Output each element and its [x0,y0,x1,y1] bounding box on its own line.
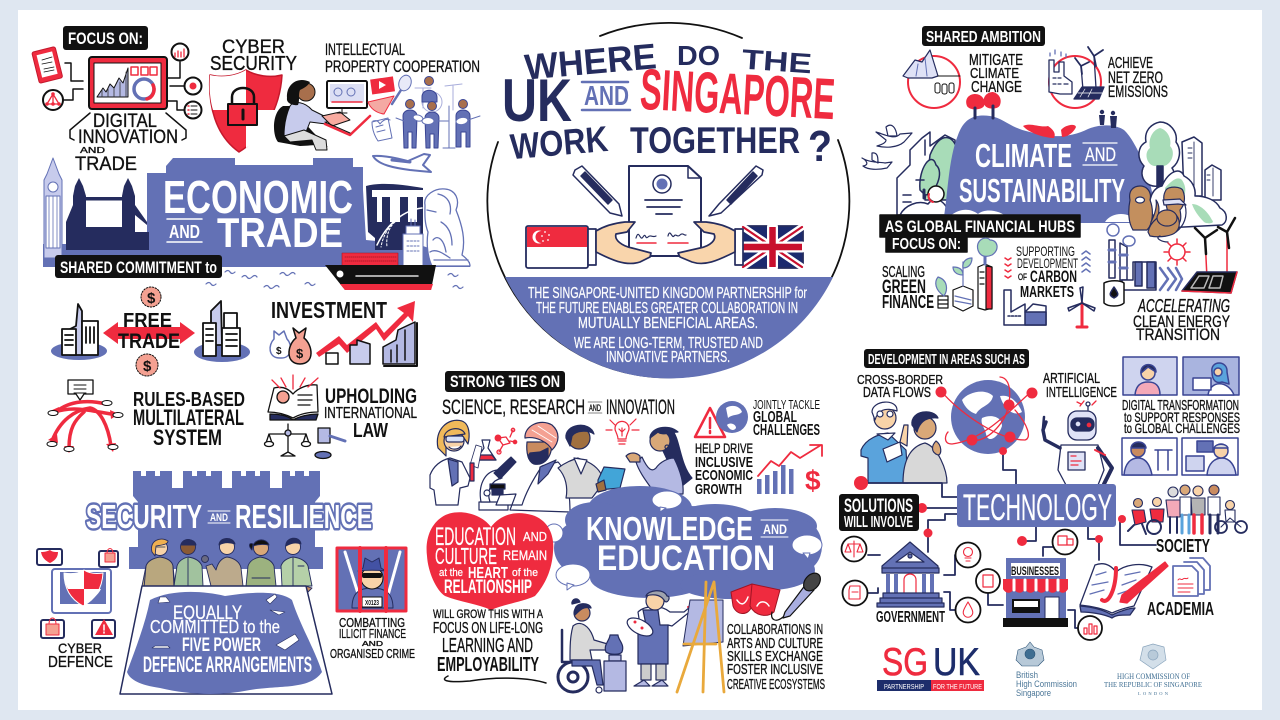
icon: cyber defence: CYBER [58,640,102,656]
images: digital transformation panels [1122,357,1239,475]
shared commitment label: SHARED COMMITMENT to [60,258,217,277]
illustration: globe with data orbits [936,377,1038,454]
block: free trade [51,287,250,376]
summary text: WE ARE LONG-TERM, TRUSTED AND [574,335,763,352]
castle backdrop [129,471,323,569]
illustration: two men discussing [861,402,947,483]
panel: security and resilience [37,471,415,694]
summary text: MUTUALLY BENEFICIAL AREAS. [578,315,758,332]
text: five power defence arrangements [143,603,312,677]
text: collaborations in arts and culture: FOSTER INCLUSIVE [727,661,823,678]
icon: money bags: $ [296,346,304,361]
icon: scales and gavel [264,424,345,458]
technology box [957,484,1116,528]
text: accelerating clean energy transition [1133,296,1230,344]
text: upholding international law: UPHOLDING [325,385,417,408]
text: supporting development of carbon markets [1016,243,1078,301]
financial hubs label [880,215,1080,253]
icon: money bags [270,328,311,364]
illustration: otters [1129,186,1186,242]
text: accelerating clean energy transition: TRANSITION [1136,325,1220,344]
text: five power defence arrangements: FIVE POWER [182,635,261,656]
heart: education and culture: CULTURE [435,543,497,569]
heading: science, research and innovation: SCIENCE, RESEARCH [442,396,585,419]
label: government: GOVERNMENT [876,609,945,626]
summary text: INNOVATIVE PARTNERS. [606,349,730,366]
molecule [495,428,517,454]
text: upholding international law [324,385,417,442]
solutions label [839,494,919,531]
focus on label [63,26,148,50]
heading: science, research and innovation: AND [589,403,601,413]
text: five power defence arrangements: COMMITTED to the [150,617,280,637]
logo: high commission of the republic of singapore [1104,644,1202,696]
heart: education and culture: RELATIONSHIP [444,577,532,598]
summary text: THE FUTURE ENABLES GREATER COLLABORATION IN [536,300,798,317]
title: UK [502,67,572,134]
scientist with flask [430,420,496,505]
text: artificial intelligence: INTELLIGENCE [1046,384,1117,401]
heading: economic and trade: ECONOMIC [163,171,353,223]
text: collaborations in arts and culture [727,621,825,693]
icon: carbon market arrows [1005,251,1090,278]
logo: british high commission singapore [1016,642,1077,699]
lightbulb [606,419,639,444]
solutions label: SOLUTIONS [844,496,913,517]
icon: open book with pen [1080,562,1168,618]
text: supporting development of carbon markets: OF [1018,272,1027,282]
development label: DEVELOPMENT IN AREAS SUCH AS [868,351,1025,368]
text: artificial intelligence: ARTIFICIAL [1043,370,1100,387]
icon: signed document [629,166,701,256]
illustration: right buildings and trees [1139,122,1226,228]
text: combatting illicit finance: ILLICIT FINANCE [339,627,406,641]
hill with trees [943,92,1162,223]
icon: shaking hands with document [588,222,743,265]
circle outline [487,23,849,377]
shared commitment label [55,255,222,278]
icon: warning and globe [695,401,748,437]
text: free trade [118,310,180,353]
technology box: TECHNOLOGY [963,487,1112,528]
logo: sg uk partnership for the future: SG [882,641,928,684]
heading: knowledge and education [586,510,788,578]
text: achieve net zero emissions [1108,55,1168,101]
block: rules-based multilateral system [47,380,245,453]
text: life-long learning and employability: WILL GROW THIS WITH A [433,607,543,621]
illustration: easel [677,582,724,692]
heart: education and culture: at the [439,567,463,579]
icon: singapore flag [526,226,588,268]
heading: security and resilience: RESILIENCE [235,498,372,535]
icon: theatre masks [731,584,780,615]
icon: factory and wind turbine [1004,287,1095,327]
financial hubs label: AS GLOBAL FINANCIAL HUBS [885,218,1075,236]
illustration: painter [624,591,698,686]
title: AND [584,80,629,111]
heading: economic and trade: AND [169,222,200,242]
microscope [479,457,516,510]
text: upholding international law: INTERNATIONAL [324,405,417,422]
text: free trade: FREE [123,310,172,332]
icon: pens [573,166,763,216]
focus on label: FOCUS ON: [68,29,143,48]
text: combatting illicit finance: AND [362,641,383,648]
text: rules-based multilateral system: RULES-BASED [133,389,245,411]
heading: climate and sustainability: SUSTAINABILITY [959,172,1125,209]
heart: education and culture: HEART [468,565,508,582]
text: five power defence arrangements: EQUALLY [173,603,242,624]
heading: cyber security: CYBER [222,37,285,58]
icon: lighthouse tower [403,219,423,268]
text: digital innovation and trade [70,111,186,175]
icon: red trade arrow [103,322,195,344]
heart: education and culture: EDUCATION [435,523,516,551]
text: life-long learning and employability [433,607,546,683]
text: mitigate climate change: MITIGATE [969,52,1023,69]
text: five power defence arrangements: DEFENCE ARRANGEMENTS [143,652,312,677]
illustration: scientists [430,419,692,512]
connector nodes [854,447,1126,546]
text: accelerating clean energy transition: ACCELERATING [1137,296,1230,316]
text: upholding international law: LAW [353,420,388,442]
block: upholding international law [264,375,417,458]
heart: education and culture: of the [512,567,538,579]
heading: security and resilience: AND [210,512,228,524]
text: digital innovation and trade: INNOVATION [78,127,178,148]
icon: factory and renewables [1049,47,1104,108]
text: help drive inclusive economic growth: HELP DRIVE [695,440,753,456]
heading: economic and trade: TRADE [217,209,343,256]
icon: dollar shields: $ [143,358,152,375]
icon: microphone [772,570,824,620]
icon: government building [877,542,944,607]
block: investment [270,297,417,366]
text: jointly tackle global challenges: GLOBAL [753,409,797,426]
shared ambition label [922,26,1045,46]
icon: clean energy transition [1104,218,1237,306]
icon: businesses shop [1003,558,1068,627]
logos [877,641,1202,699]
text: mitigate climate change: CLIMATE [970,65,1019,82]
icon: dollar shields [136,287,161,376]
text: scaling green finance: GREEN [882,277,926,298]
heart: education and culture: AND [523,529,547,544]
heading: climate and sustainability: CLIMATE [975,137,1072,174]
panel: central title circle [487,23,849,379]
text: mitigate climate change: CHANGE [971,79,1022,96]
text: combatting illicit finance: ORGANISED CRIME [330,646,415,661]
text: digital innovation and trade: AND [80,146,105,155]
heading: climate and sustainability: AND [1085,145,1116,166]
icon: network arcs [47,380,123,453]
text: accelerating clean energy transition: CLEAN ENERGY [1133,312,1230,331]
panel: climate and sustainability [862,26,1237,344]
title: THE [741,44,813,79]
icon: container ship [325,253,436,290]
icon: big ben [44,158,62,258]
icon: cyber defence: DEFENCE [48,654,113,671]
shared ambition label: SHARED AMBITION [926,29,1041,46]
text: achieve net zero emissions: EMISSIONS [1108,82,1168,101]
logo: british high commission singapore: British [1016,670,1038,681]
text: scaling green finance [882,264,934,312]
text: mitigate climate change [969,52,1023,96]
text: jointly tackle global challenges [753,397,820,439]
illustration: left buildings and tree [897,132,957,215]
text: collaborations in arts and culture: CREATIVE ECOSYSTEMS [727,676,825,693]
man with tablet [558,425,625,498]
text: supporting development of carbon markets: SUPPORTING [1016,243,1075,259]
text: cross-border data flows: DATA FLOWS [863,384,931,401]
icon: cyber defence [37,548,118,671]
text: artificial intelligence [1043,370,1117,401]
heading: intellectual property cooperation [325,40,480,76]
text: collaborations in arts and culture: COLLABORATIONS IN [727,621,823,638]
text: supporting development of carbon markets: MARKETS [1020,284,1074,301]
text: combatting illicit finance: COMBATTING [339,615,405,630]
label: academia: ACADEMIA [1147,599,1214,619]
title: WORK [508,118,610,167]
illustration: five service personnel [142,538,312,592]
text: help drive inclusive economic growth [695,440,753,498]
title: WHERE [523,35,658,88]
logo: sg uk partnership for the future: PARTNERSHIP [884,684,924,691]
icon: tower bridge [66,178,149,250]
icon: money bags: $ [276,346,282,357]
text: help drive inclusive economic growth: INCLUSIVE [695,454,753,471]
heading: cyber security [210,37,297,75]
text: jointly tackle global challenges: JOINTLY TACKLE [753,397,820,412]
title: TOGETHER [630,120,800,161]
icon: merlion [425,189,470,266]
logo: sg uk partnership for the future [877,641,984,691]
icon: iceberg with penguins [903,50,960,108]
title: ? [808,122,832,171]
panel: economic and trade [32,26,480,290]
heading: security and resilience: SECURITY [86,498,202,535]
logo: high commission of the republic of singapore: HIGH COMMISSION OF [1117,672,1190,681]
text: life-long learning and employability: LEARNING AND [442,635,533,657]
heart: education and culture: REMAIN [503,547,547,563]
text: digital transformation [1122,397,1240,436]
icon: criminal behind bars [337,548,406,611]
text: achieve net zero emissions: ACHIEVE [1108,55,1153,72]
text: rules-based multilateral system: MULTILATERAL [133,405,244,430]
text: free trade: TRADE [118,330,180,353]
text: achieve net zero emissions: NET ZERO [1108,68,1163,87]
illustration: potter in wheelchair [558,599,626,693]
icon: airplane [373,154,431,172]
text: life-long learning and employability: FOCUS ON LIFE-LONG [433,620,543,637]
text: life-long learning and employability: EMPLOYABILITY [437,654,539,676]
text: jointly tackle global challenges: CHALLENGES [753,422,820,439]
text: scaling green finance: SCALING [882,264,925,281]
illustration: band and creative works [368,73,480,148]
text: cross-border data flows [857,373,943,401]
text: supporting development of carbon markets: CARBON [1030,267,1077,286]
text: scaling green finance: FINANCE [882,292,934,312]
icons: business circles [976,530,1102,640]
icon: criminal behind bars: X0123 [365,600,379,607]
icon: growth chart with dollar: $ [805,465,821,496]
icon: right city [203,301,240,356]
blue summary band [505,277,833,379]
heading: security and resilience [86,498,372,535]
icon: green finance plants and tower [936,238,997,311]
icon: growth arrow [316,301,415,357]
heading: knowledge and education: AND [763,521,787,537]
heading: knowledge and education: KNOWLEDGE [586,510,753,547]
panel: knowledge and education [427,371,825,693]
heart: education and culture [427,512,553,610]
logo: sg uk partnership for the future: FOR THE FUTURE [933,684,982,691]
heading: cyber security: SECURITY [210,53,297,75]
logo: high commission of the republic of singapore: THE REPUBLIC OF SINGAPORE [1104,680,1202,689]
logo: sg uk partnership for the future: UK [933,641,980,684]
text: rules-based multilateral system: SYSTEM [153,425,222,450]
logo: british high commission singapore: Singapore [1016,688,1051,699]
icon: birds [862,125,912,169]
summary text: THE SINGAPORE-UNITED KINGDOM PARTNERSHIP for [528,285,807,302]
text: rules-based multilateral system [133,389,245,450]
summary text [528,285,807,366]
heading: investment: INVESTMENT [271,297,387,323]
illustration: woman at computer [274,80,370,150]
heading: intellectual property cooperation: INTELLECTUAL [325,40,405,59]
label: society: SOCIETY [1156,536,1210,556]
development label [864,349,1029,368]
heading: science, research and innovation: INNOVATION [606,396,675,419]
panel: technology [839,349,1247,640]
heading: climate and sustainability [959,137,1125,209]
heading: economic and trade [163,171,353,256]
skyline banner [43,158,470,267]
connector lines [861,451,1156,628]
icon: growth chart with dollar [757,445,822,496]
icon: left city [62,304,98,355]
strong ties label [445,371,565,392]
text: digital innovation and trade: DIGITAL [93,111,157,132]
icon: shield with padlock [210,70,282,152]
illustration: society group [1128,485,1247,534]
illustration: robot [1043,401,1112,485]
icon: uk flag [742,226,803,268]
logo: british high commission singapore: High Commission [1016,679,1077,690]
heading: knowledge and education: EDUCATION [597,539,775,578]
man with turban [496,422,570,512]
solutions label: WILL INVOLVE [844,514,913,531]
icon: dollar shields: $ [147,290,156,307]
strong ties label: STRONG TIES ON [450,373,560,391]
icon: digital tablet with connected icons [32,44,201,118]
financial hubs label: FOCUS ON: [892,236,961,253]
text: supporting development of carbon markets: DEVELOPMENT [1017,255,1078,271]
title: SINGAPORE [639,57,837,132]
woman gesturing [626,427,692,494]
text: digital innovation and trade: TRADE [75,154,137,175]
title [502,35,837,171]
text: help drive inclusive economic growth: GROWTH [695,481,742,498]
text: help drive inclusive economic growth: ECONOMIC [695,467,753,484]
logo: high commission of the republic of singapore: LONDON [1138,691,1169,696]
icon: open book [268,375,318,420]
title: DO [677,40,720,71]
heading: intellectual property cooperation: PROPERTY COOPERATION [325,57,480,76]
icon: businesses shop: BUSINESSES [1011,564,1059,578]
text: combatting illicit finance [330,615,415,661]
icon: rising buildings [326,322,417,366]
icons: government circles [842,536,980,622]
knowledge cloud [545,486,822,599]
table with map [120,586,332,694]
text: cross-border data flows: CROSS-BORDER [857,373,943,387]
text: collaborations in arts and culture: SKILLS EXCHANGE [727,648,823,665]
text: collaborations in arts and culture: ARTS AND CULTURE [727,635,823,652]
icon: documents [1173,558,1210,596]
